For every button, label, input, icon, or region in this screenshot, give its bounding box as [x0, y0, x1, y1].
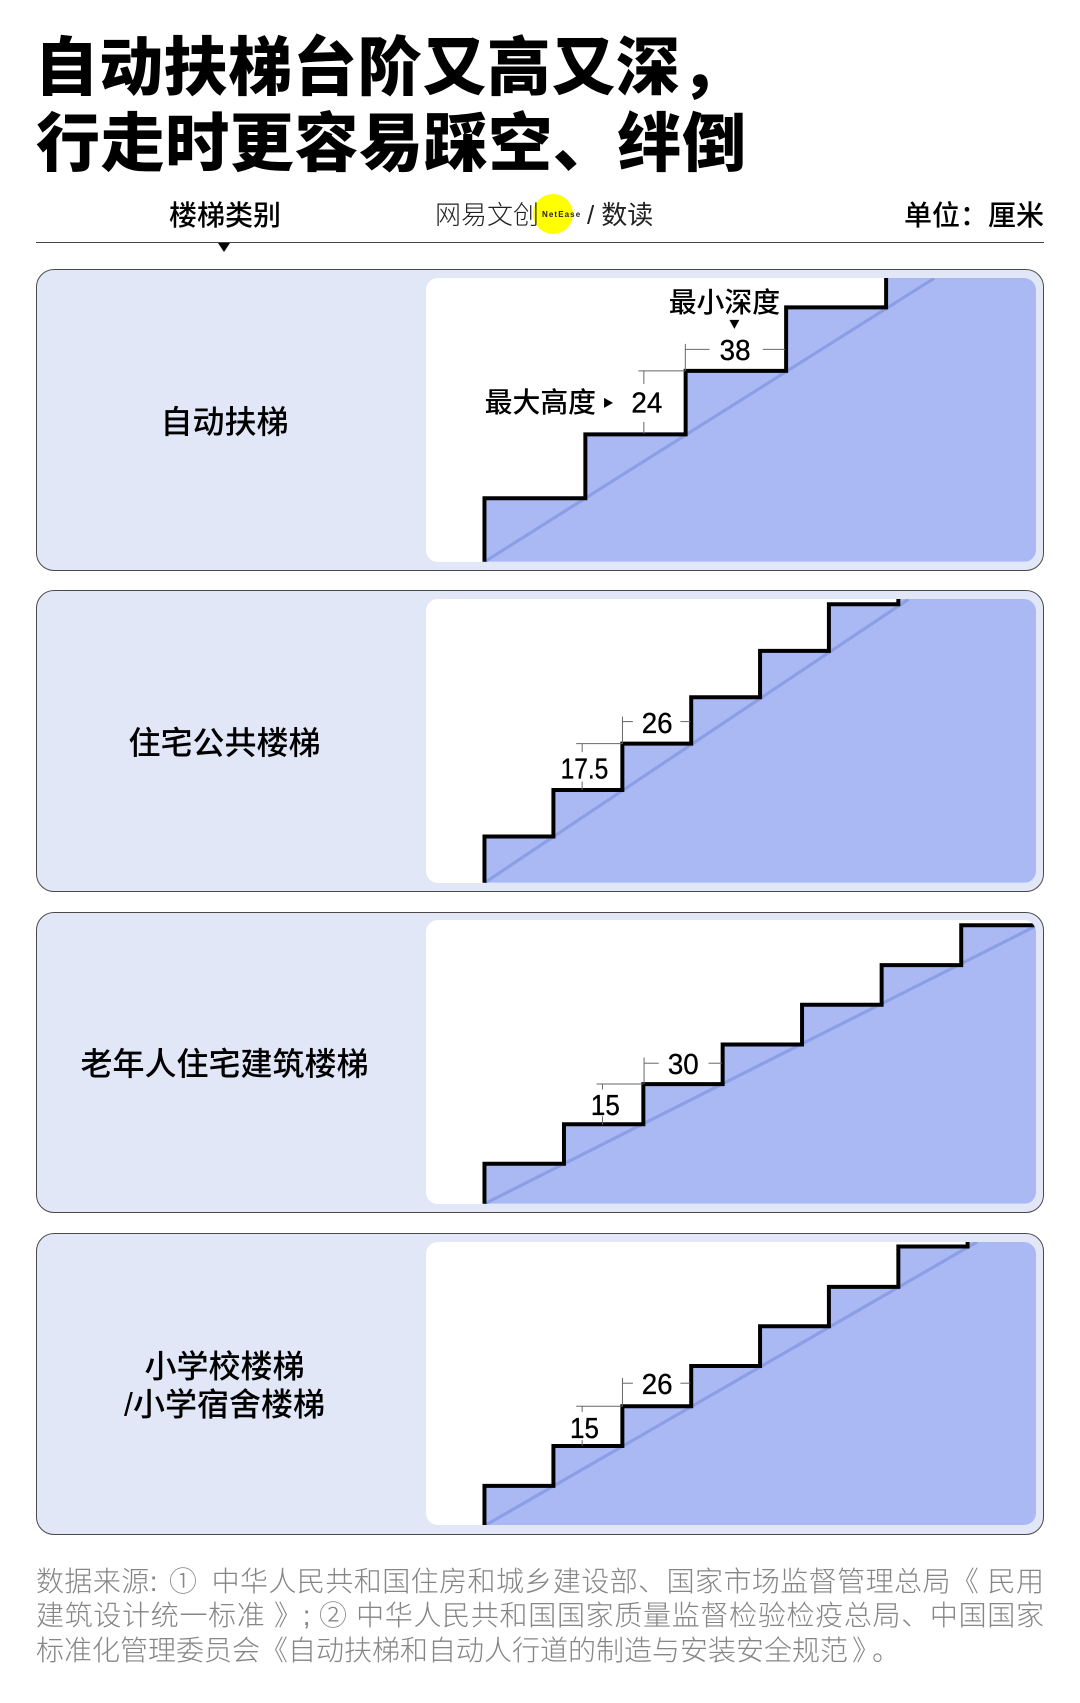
panel: primary school stairs [36, 1233, 1044, 1535]
source note: 数据来源: ① 中华人民共和国住房和城乡建设部、国家市场监督管理总局《 民用 [36, 1566, 1044, 1596]
title [34, 32, 747, 180]
stair chart: escalator: 最小深度 [668, 287, 780, 318]
stair chart: residential public stairs: 26 [641, 708, 672, 740]
panel label: primary school stairs: 小学校楼梯 [144, 1348, 304, 1384]
title: 自动扶梯台阶又高又深， [34, 32, 745, 104]
panel: elderly residential stairs [36, 912, 1044, 1213]
logo text: NetEase: NetEase [542, 210, 581, 219]
stair chart: elderly residential stairs: 15 [591, 1090, 619, 1122]
stair chart: escalator: 24 [631, 387, 662, 419]
stair chart: primary school stairs: 15 [570, 1412, 598, 1445]
title: 行走时更容易踩空、绊倒 [36, 108, 747, 180]
panel: escalator [36, 269, 1044, 571]
panel: residential public stairs [36, 590, 1044, 892]
source note: 标准化管理委员会《自动扶梯和自动人行道的制造与安装安全规范》。 [36, 1635, 900, 1666]
column heading: stair type: 楼梯类别 [169, 200, 281, 231]
header rule [36, 242, 1044, 243]
logo: NetEase data reading [435, 194, 653, 234]
source note: 建筑设计统一标准 》; ② 中华人民共和国国家质量监督检验检疫总局、中国国家 [36, 1600, 1044, 1631]
panel label: escalator: 自动扶梯 [160, 404, 288, 440]
stair chart: primary school stairs: 26 [641, 1368, 672, 1400]
panel label: elderly residential stairs: 老年人住宅建筑楼梯 [80, 1046, 368, 1082]
stair chart: elderly residential stairs: 30 [667, 1049, 698, 1081]
stair chart: residential public stairs: 17.5 [560, 753, 608, 786]
panel label: primary school stairs: /小学宿舍楼梯 [124, 1387, 325, 1423]
stair chart: escalator [426, 278, 1036, 562]
stair chart: primary school stairs [426, 1242, 1036, 1525]
panel label: primary school stairs [124, 1348, 325, 1423]
source note [36, 1566, 1044, 1666]
logo text: wangyi wenchuang: 网易文创 [435, 200, 539, 230]
stair chart: residential public stairs [426, 599, 1036, 883]
logo text: slash data reading: / 数读 [587, 200, 653, 230]
icon: down arrow under heading [218, 243, 230, 252]
logo yellow circle [533, 194, 573, 234]
unit label: 单位：厘米 [904, 200, 1044, 231]
stair chart: elderly residential stairs [426, 920, 1036, 1204]
panel label: residential public stairs: 住宅公共楼梯 [128, 725, 320, 761]
stair chart: escalator: 最大高度 [484, 387, 596, 418]
stair chart: escalator: 38 [719, 335, 750, 367]
